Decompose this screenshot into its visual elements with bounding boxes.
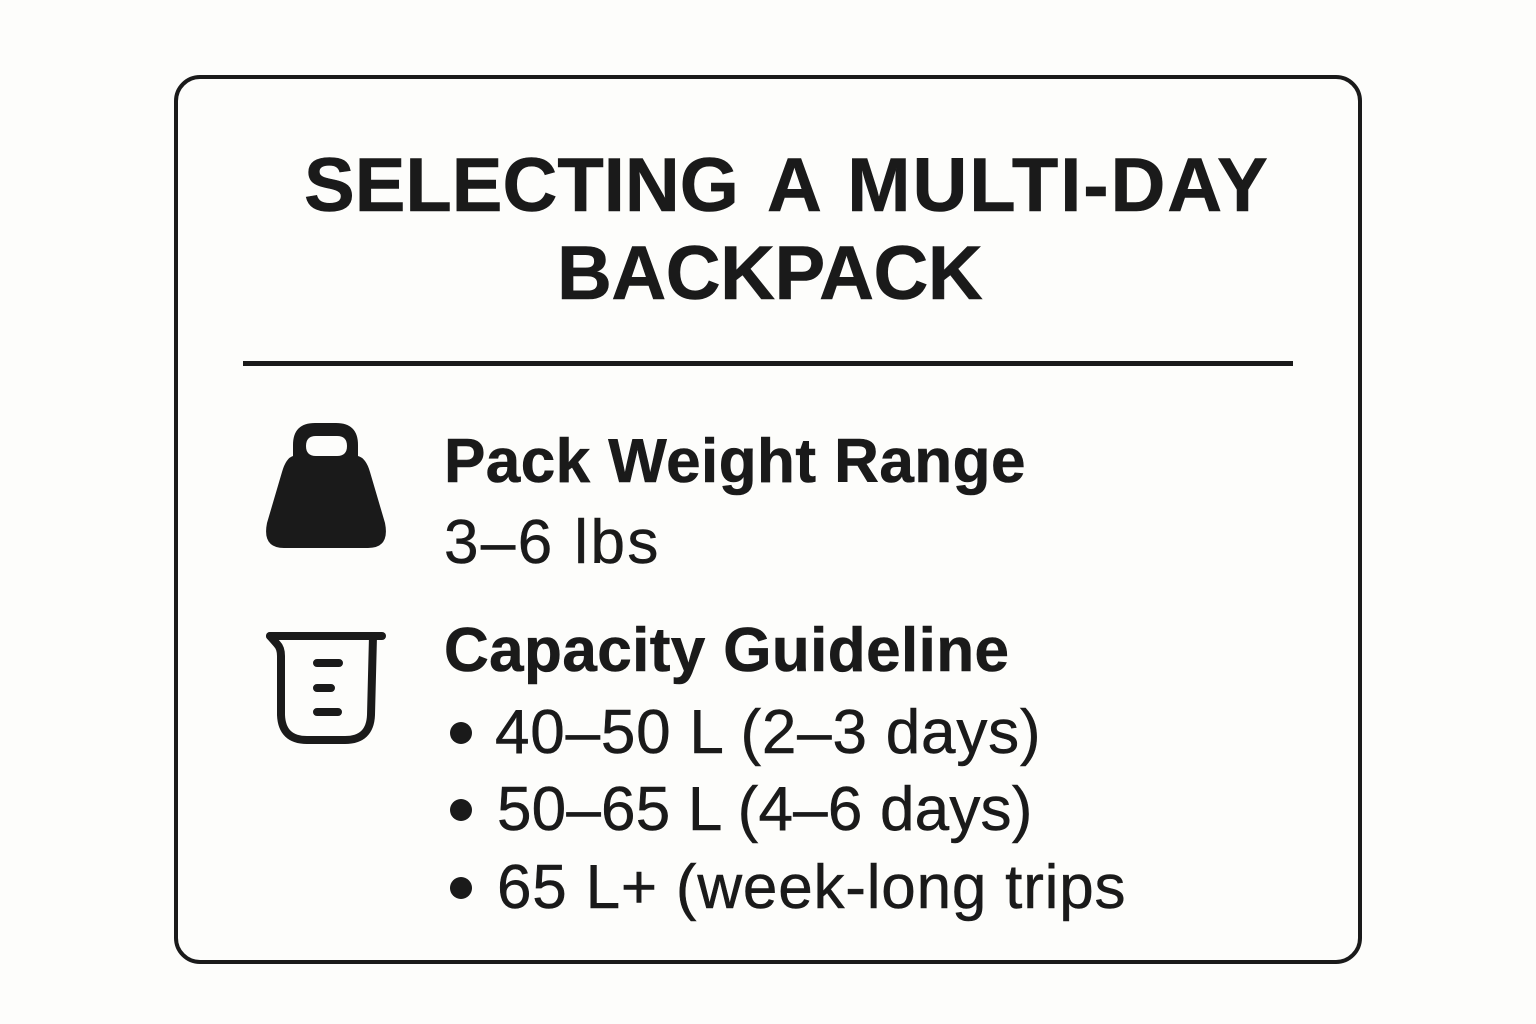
heading: capacity guideline: Capacity Guideline [444,616,1009,685]
text: weight value: 3–6 lbs [444,508,661,577]
list: capacity items: 40–50 L (2–3 days) [495,698,1041,767]
title: BACKPACK [557,231,982,316]
list: capacity items: 50–65 L (4–6 days) [497,775,1033,844]
list: capacity items: 65 L+ (week-long trips [497,853,1126,922]
list: capacity items [450,698,1126,922]
heading: pack weight range: Pack Weight Range [444,427,1026,496]
title: SELECTING A MULTI-DAY [304,143,1270,228]
icon: weight [266,423,386,548]
icon: measuring cup [266,632,386,744]
title [304,143,1270,316]
panel: backpack card [174,75,1362,964]
